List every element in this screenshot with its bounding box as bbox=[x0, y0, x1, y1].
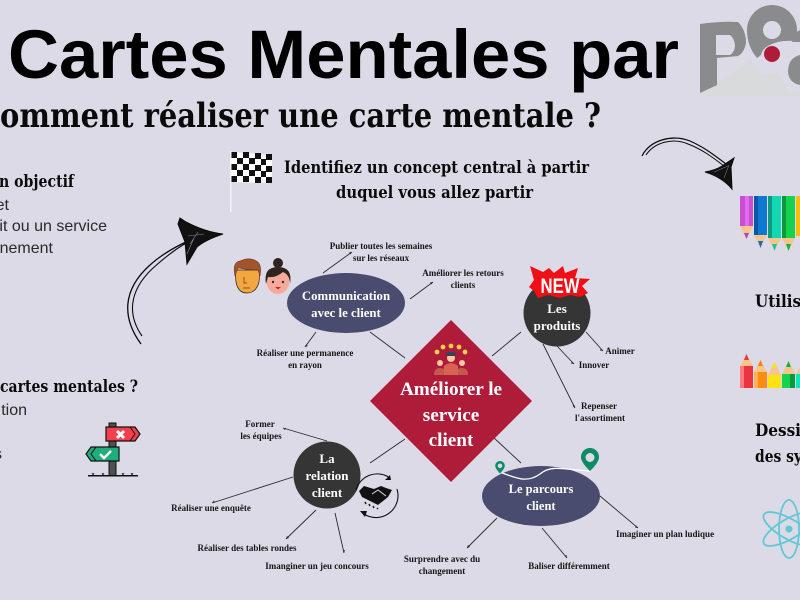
icon: handshake bbox=[356, 474, 398, 518]
heading: dessiner des symboles bbox=[755, 421, 800, 467]
node: communication avec le client: Communication bbox=[302, 289, 390, 303]
labels: communication bbox=[257, 241, 504, 370]
labels: communication: Améliorer les retours bbox=[422, 268, 504, 278]
central diamond bbox=[370, 320, 532, 482]
labels: parcours: changement bbox=[419, 566, 465, 576]
labels: parcours: Imaginer un plan ludique bbox=[616, 529, 714, 539]
node: communication avec le client bbox=[287, 273, 405, 333]
title: Cartes Mentales par bbox=[8, 16, 679, 93]
node: communication avec le client: avec le client bbox=[311, 306, 382, 320]
icon: signpost bbox=[86, 423, 140, 476]
node: les produits bbox=[524, 266, 590, 346]
text block: objectif: it ou un service bbox=[0, 218, 107, 235]
labels: communication: sur les réseaux bbox=[353, 253, 410, 263]
connector lines bbox=[212, 252, 638, 558]
heading: identifiez un concept: Identifiez un concept central à partir bbox=[284, 158, 590, 178]
labels: relation: Réaliser une enquête bbox=[171, 503, 251, 513]
text block: cartes mentales: cartes mentales ? bbox=[0, 377, 138, 397]
node: la relation client: La bbox=[319, 451, 335, 466]
labels: communication: Publier toutes les semaines bbox=[330, 241, 433, 251]
node: les produits: Les bbox=[547, 301, 567, 316]
text block: objectif: nement bbox=[0, 240, 54, 257]
labels: produits: Animer bbox=[605, 346, 635, 356]
icon: large pin bbox=[581, 448, 599, 471]
icon: new burst: NEW bbox=[540, 275, 580, 298]
arrow: right sketch arrow bbox=[642, 138, 734, 189]
icon: pencils pointing down bbox=[740, 196, 800, 251]
labels: communication: en rayon bbox=[288, 360, 322, 370]
central diamond: client bbox=[429, 430, 474, 451]
arrow: left sketch arrow bbox=[128, 218, 223, 344]
text block: cartes mentales bbox=[0, 377, 138, 463]
central diamond: Améliorer le bbox=[400, 379, 503, 400]
labels: produits bbox=[575, 346, 635, 423]
text block: objectif: n objectif bbox=[0, 172, 75, 192]
labels: relation bbox=[171, 419, 369, 571]
labels: produits: l'assortiment bbox=[575, 413, 625, 423]
node: la relation client: relation bbox=[305, 468, 349, 483]
labels: produits: Repenser bbox=[581, 401, 617, 411]
central diamond: service bbox=[423, 405, 480, 426]
text block: objectif bbox=[0, 172, 107, 257]
node: le parcours client: client bbox=[526, 499, 556, 513]
icon: faces bbox=[234, 258, 290, 294]
labels: relation: Réaliser des tables rondes bbox=[198, 543, 297, 553]
labels: relation: Former bbox=[245, 419, 275, 429]
node: les produits: produits bbox=[534, 318, 580, 333]
icon: checkered flag bbox=[230, 151, 272, 212]
text block: cartes mentales: tion bbox=[1, 402, 27, 419]
labels: parcours: Surprendre avec du bbox=[404, 554, 480, 564]
node: le parcours client bbox=[482, 448, 600, 526]
icon: small pin bbox=[495, 461, 505, 474]
icon: atom bbox=[759, 500, 800, 558]
labels: communication: Réaliser une permanence bbox=[257, 348, 353, 358]
node: la relation client bbox=[294, 442, 360, 508]
icon: team with stars bbox=[434, 344, 468, 375]
node: le parcours client: Le parcours bbox=[509, 482, 573, 496]
heading: identifiez un concept: duquel vous allez partir bbox=[336, 183, 534, 203]
icon: pencils pointing up bbox=[740, 354, 800, 388]
labels: produits: Innover bbox=[579, 360, 609, 370]
labels: relation: les équipes bbox=[240, 431, 282, 441]
labels: parcours: Baliser différemment bbox=[528, 561, 610, 571]
heading: identifiez un concept bbox=[284, 158, 590, 203]
logo bbox=[700, 5, 800, 96]
labels: relation: Imanginer un jeu concours bbox=[265, 561, 369, 571]
labels: communication: clients bbox=[451, 280, 476, 290]
labels: parcours bbox=[404, 529, 714, 576]
node: la relation client: client bbox=[312, 485, 343, 500]
